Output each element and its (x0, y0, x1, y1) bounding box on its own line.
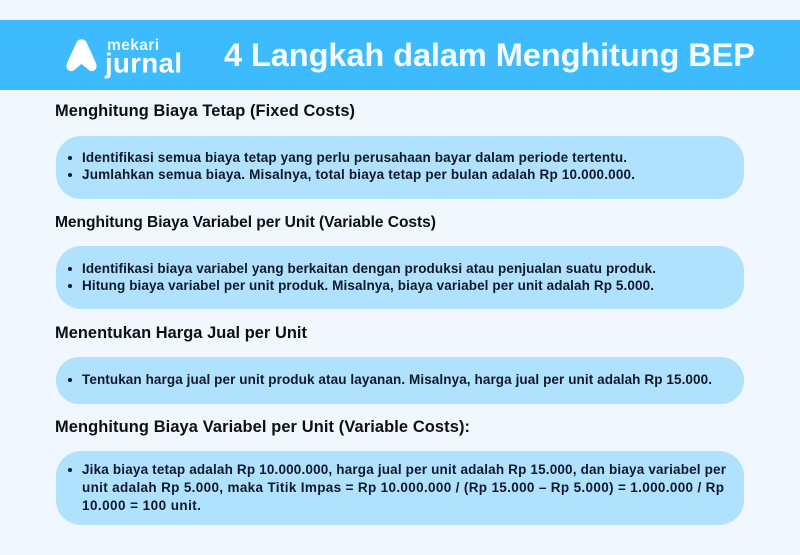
title: 4 Langkah dalam Menghitung BEP (224, 36, 755, 73)
logo wordmark: jurnal (104, 48, 182, 78)
panel: step 4 (56, 451, 744, 525)
panel: step 4: 10.000 = 100 unit. (82, 498, 201, 513)
panel: step 1 (56, 136, 744, 199)
panel: step 2 (56, 246, 744, 309)
heading: step 1: Menghitung Biaya Tetap (Fixed Costs) (55, 102, 355, 120)
heading: step 2: Menghitung Biaya Variabel per Unit (Variable Costs) (55, 214, 436, 231)
panel: step 1: Jumlahkan semua biaya. Misalnya, total biaya tetap per bulan adalah Rp 10.000.000. (82, 167, 635, 182)
heading: step 4: Menghitung Biaya Variabel per Unit (Variable Costs): (55, 418, 470, 436)
panel: step 2: Identifikasi biaya variabel yang berkaitan dengan produksi atau penjualan suatu produk. (82, 261, 656, 276)
icon: mekari jurnal logo mark (69, 42, 94, 68)
logo wordmark: mekari (107, 37, 159, 54)
panel: step 1: Identifikasi semua biaya tetap yang perlu perusahaan bayar dalam periode tertentu. (82, 150, 627, 165)
panel: step 3: Tentukan harga jual per unit produk atau layanan. Misalnya, harga jual per unit adalah Rp 15.000. (82, 372, 712, 387)
header banner (0, 20, 800, 90)
panel: step 3 (56, 357, 744, 404)
heading: step 3: Menentukan Harga Jual per Unit (55, 324, 308, 342)
panel: step 2: Hitung biaya variabel per unit produk. Misalnya, biaya variabel per unit adalah Rp 5.000. (82, 278, 654, 293)
panel: step 4: Jika biaya tetap adalah Rp 10.000.000, harga jual per unit adalah Rp 15.000, dan biaya variabel per (82, 462, 727, 477)
panel: step 4: unit adalah Rp 5.000, maka Titik Impas = Rp 10.000.000 / (Rp 15.000 – Rp 5.000) = 1.000.000 / Rp (82, 480, 724, 495)
